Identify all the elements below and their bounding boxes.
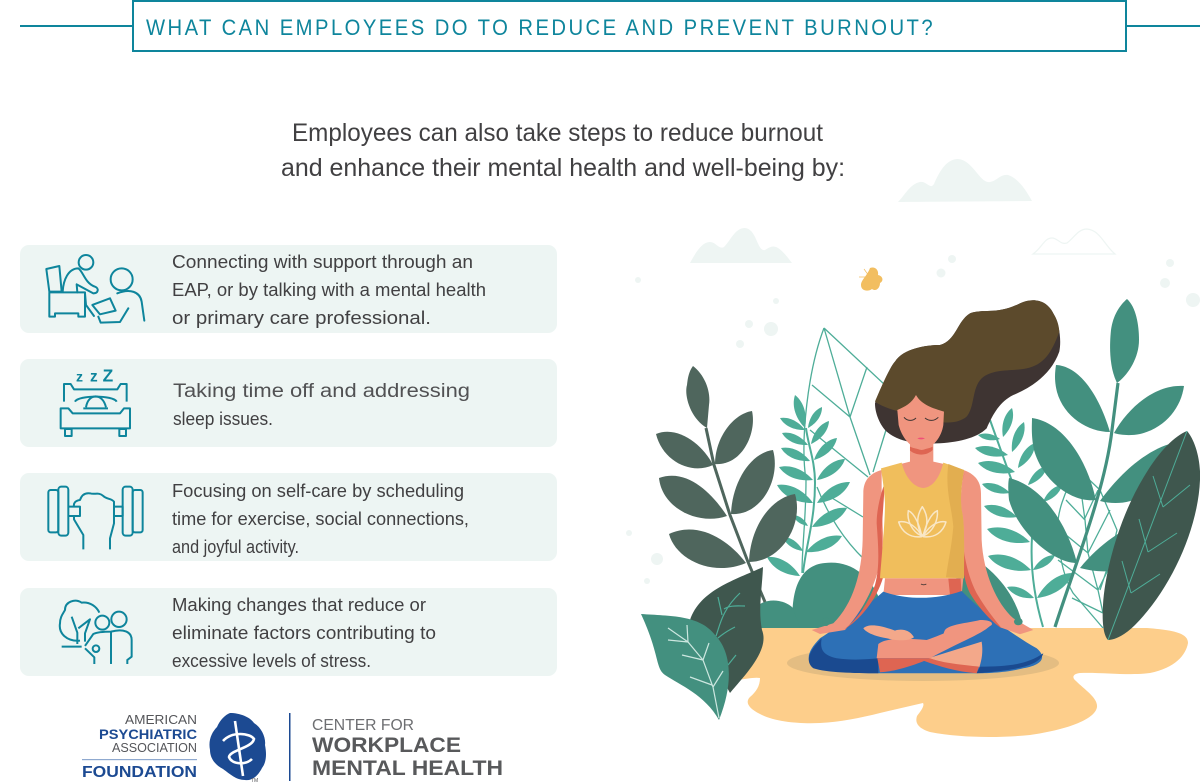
heading banner [20,1,1200,51]
logo: Center for Workplace Mental Health: CENTER FOR [312,717,414,734]
card: connecting with support [20,245,557,333]
intro text [281,119,845,182]
heading banner: WHAT CAN EMPLOYEES DO TO REDUCE AND PREVENT BURNOUT? [146,15,933,40]
card: self-care: and joyful activity. [172,537,299,557]
icon: bed with zzz: z [76,368,83,384]
illustration: ground [737,628,1188,737]
background clouds [690,159,1115,263]
butterfly [859,267,882,291]
neck and shoulders [901,437,944,493]
icon: bed with zzz: z [90,368,98,385]
illustration: left fern [764,394,853,581]
card: reducing stress factors: eliminate factors contributing to [172,623,436,643]
icon: brain and staff emblem [209,713,266,783]
icon: bed with zzz: Z [103,365,114,385]
logo: American Psychiatric Association Foundation: PSYCHIATRIC [99,726,197,742]
logo: Center for Workplace Mental Health: WORKPLACE [312,734,461,757]
logo: American Psychiatric Association Foundation [82,713,266,783]
icon: bed with zzz [61,365,130,436]
card: time off and sleep [20,359,557,447]
intro text: Employees can also take steps to reduce burnout [292,119,823,147]
logo: American Psychiatric Association Foundation: FOUNDATION [82,764,197,781]
card: self-care: time for exercise, social connections, [172,509,469,529]
card: connecting with support: Connecting with support through an [172,252,473,272]
divider [289,713,290,781]
illustration: right dark leaf [1103,431,1200,640]
logo: Center for Workplace Mental Health: MENTAL HEALTH [312,757,503,780]
icon: fist holding dumbbell [48,487,143,549]
card: time off and sleep: sleep issues. [173,409,273,429]
icon: lotus [899,507,946,537]
card: connecting with support: or primary care professional. [172,308,431,328]
logo: American Psychiatric Association Foundation: ASSOCIATION [112,741,197,755]
icon: two people and a tree [60,601,132,664]
face [897,395,944,450]
card: reducing stress factors: Making changes that reduce or [172,595,426,615]
illustration: right large-leaf plant [1008,299,1184,627]
icon: therapist and client [46,255,144,323]
illustration: outline leaf behind left [802,328,886,573]
logo: American Psychiatric Association Foundation: AMERICAN [125,713,197,727]
illustration: front leaves [641,567,764,720]
pants [809,591,1043,673]
illustration: bushes [755,550,1023,628]
card: reducing stress factors [20,588,557,676]
card: reducing stress factors: excessive levels of stress. [172,651,371,671]
card: self-care: Focusing on self-care by scheduling [172,481,464,501]
intro text: and enhance their mental health and well-being by: [281,154,845,182]
hair [875,300,1060,444]
decorative dots [626,255,1200,584]
tank top with lotus [880,463,964,578]
logo: Center for Workplace Mental Health [312,717,503,780]
card: self-care [20,473,557,561]
card: connecting with support: EAP, or by talking with a mental health [172,280,486,300]
midriff [883,578,963,595]
illustration: right fern [974,407,1076,627]
arms [812,470,883,634]
illustration: left dark plant [656,366,797,602]
illustration: meditating woman [809,300,1060,673]
illustration: outline leaf behind right [1057,469,1117,628]
crossed legs and feet [863,620,992,673]
card: time off and sleep: Taking time off and addressing [173,381,470,402]
